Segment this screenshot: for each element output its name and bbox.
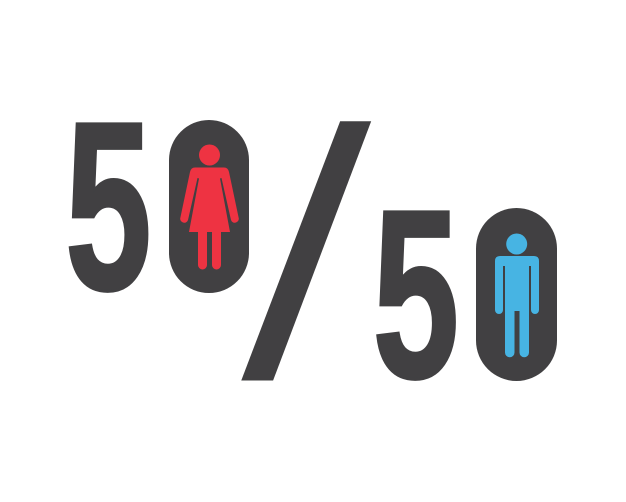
zero pill left: 0 (198, 180, 220, 224)
icon: woman (180, 144, 239, 270)
icon: man (495, 234, 539, 357)
zero pill right (476, 208, 557, 381)
zero pill left (169, 120, 249, 293)
left 50 with woman (65, 72, 249, 340)
right 50 with man (372, 160, 557, 428)
digit 5 left: 5 (65, 72, 152, 340)
digit 5 right: 5 (372, 160, 459, 428)
slash: / (236, 58, 377, 452)
zero pill right: 0 (505, 268, 528, 312)
